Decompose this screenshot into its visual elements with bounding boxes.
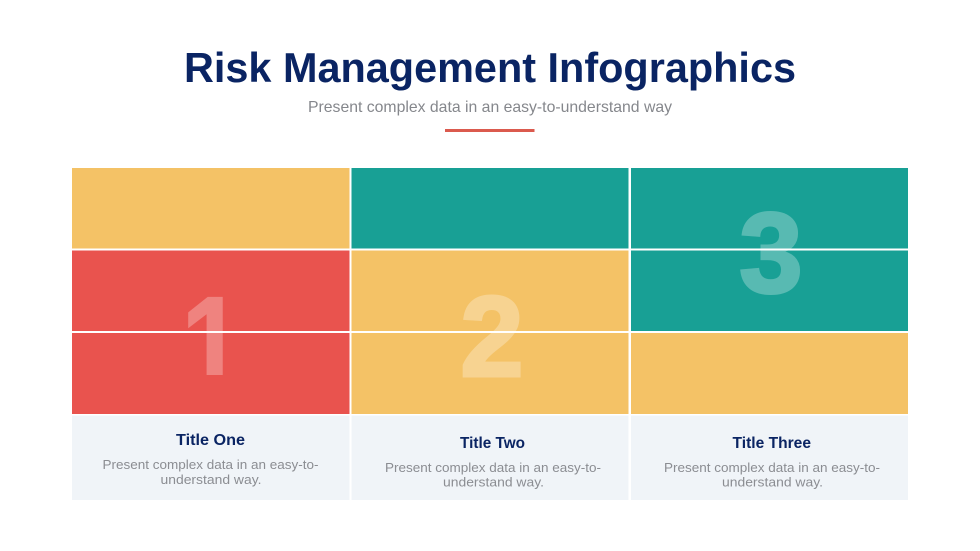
numeral 3: 3 (739, 190, 803, 317)
cell: teal top (352, 168, 628, 248)
numeral 1: 1 (181, 268, 243, 420)
cell: yellow bottom (352, 333, 628, 414)
panel: column one (72, 168, 350, 500)
cell: red bottom (72, 333, 350, 414)
card text: understand way. (443, 474, 544, 490)
cell: red middle (72, 250, 350, 331)
card title: Title One (176, 432, 245, 449)
cell: yellow top (72, 168, 350, 248)
cell: yellow bottom (631, 333, 908, 414)
card title: Title Two (460, 435, 525, 452)
subtitle: Present complex data in an easy-to-understand way (308, 99, 672, 116)
card text: understand way. (722, 474, 823, 490)
numeral 2: 2 (460, 274, 524, 401)
caption card three (631, 416, 908, 500)
card background (72, 416, 350, 500)
card text: Present complex data in an easy-to- (102, 457, 318, 472)
cell: yellow middle (352, 250, 628, 331)
card text: Present complex data in an easy-to- (385, 460, 601, 475)
card text: Present complex data in an easy-to- (664, 460, 880, 475)
panel: column three (631, 168, 908, 500)
caption card two (352, 416, 628, 500)
accent underline (445, 129, 534, 132)
card background (631, 416, 908, 500)
title: Risk Management Infographics (184, 44, 796, 91)
cell: teal middle (631, 250, 908, 331)
caption card one (72, 416, 350, 500)
card title: Title Three (732, 435, 811, 452)
panel: column two (352, 168, 628, 500)
card text: understand way. (160, 472, 262, 487)
cell: teal top (631, 168, 908, 248)
card background (352, 416, 628, 500)
